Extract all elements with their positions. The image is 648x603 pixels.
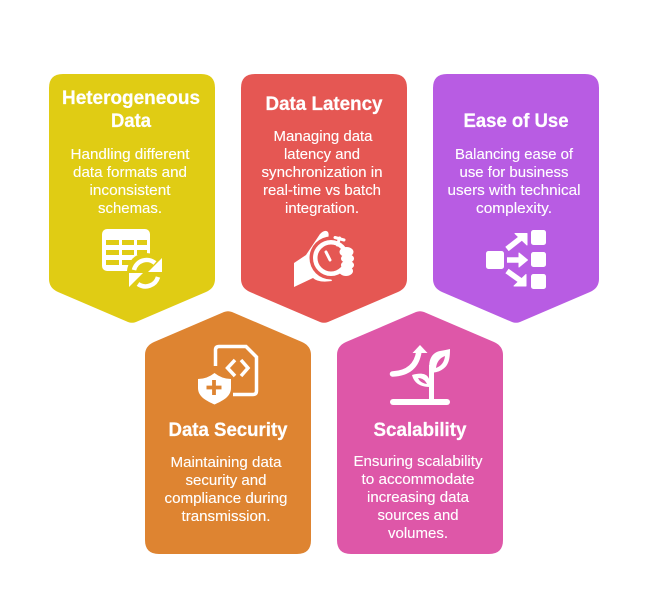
text: data security description: security and (186, 473, 266, 489)
text: ease of use description: Balancing ease of (455, 147, 574, 163)
text: data latency description: real-time vs batch (263, 183, 381, 199)
text: ease of use description: users with technical (448, 183, 580, 199)
text: scalability description: sources and (378, 508, 458, 524)
text: data security description: transmission. (182, 509, 270, 525)
heading: ease of use: Ease of Use (464, 110, 569, 132)
heading: scalability: Scalability (374, 419, 467, 441)
panel: scalability (337, 311, 503, 554)
icon: code document with shield (198, 346, 256, 404)
heading: data security: Data Security (168, 419, 288, 441)
panel: data security (145, 311, 311, 554)
text: data security description: compliance during (164, 491, 288, 507)
text: scalability description (354, 454, 483, 542)
panel: data latency (241, 74, 407, 323)
icon: flow from one box to three boxes (486, 230, 546, 289)
text: heterogeneous data description: inconsistent (90, 183, 170, 199)
text: scalability description: Ensuring scalability (354, 454, 483, 470)
text: heterogeneous data description: data formats and (73, 165, 187, 181)
panel: heterogeneous data (49, 74, 215, 323)
card shape: scalability (337, 311, 503, 554)
card shape: heterogeneous data (49, 74, 215, 323)
text: data security description (164, 455, 288, 525)
text: data latency description: integration. (285, 201, 359, 217)
text: heterogeneous data description: Handling different (70, 147, 190, 163)
text: data latency description (262, 129, 382, 217)
heading: data latency: Data Latency (266, 93, 383, 115)
card shape: data latency (241, 74, 407, 323)
heading: heterogeneous data (62, 87, 200, 132)
text: ease of use description (448, 147, 580, 217)
text: scalability description: to accommodate (362, 472, 474, 488)
text: heterogeneous data description: schemas. (98, 201, 162, 217)
text: data latency description: Managing data (274, 129, 373, 145)
icon: table with sync arrows (102, 229, 165, 291)
text: data security description: Maintaining data (170, 455, 282, 471)
icon: growing plant with arrow (390, 345, 450, 405)
heading: heterogeneous data: Heterogeneous (62, 87, 200, 109)
heading: heterogeneous data: Data (111, 110, 151, 132)
card shape: data security (145, 311, 311, 554)
panel: ease of use (433, 74, 599, 323)
text: scalability description: volumes. (388, 526, 448, 542)
text: data latency description: latency and (284, 147, 360, 163)
text: ease of use description: complexity. (476, 201, 552, 217)
text: ease of use description: use for business (460, 165, 568, 181)
text: data latency description: synchronization in (262, 165, 382, 181)
card shape: ease of use (433, 74, 599, 323)
icon: hand holding stopwatch (294, 231, 354, 287)
text: scalability description: increasing data (367, 490, 470, 506)
text: heterogeneous data description (70, 147, 190, 217)
